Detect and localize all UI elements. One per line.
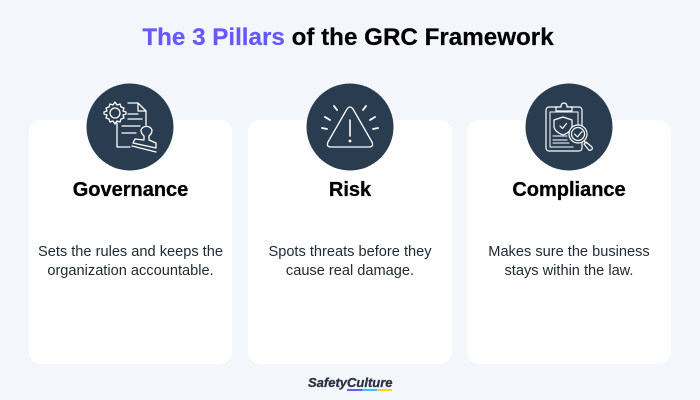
heading: risk: Risk (329, 179, 371, 201)
text: risk description (268, 244, 432, 279)
text: compliance description (488, 244, 650, 279)
panel: governance (29, 120, 232, 364)
text: governance description: Sets the rules and keeps the (38, 244, 223, 260)
text: governance description: organization accountable. (47, 263, 214, 279)
heading: governance: Governance (73, 179, 188, 201)
logo: SafetyCulture: SafetyCulture (308, 375, 393, 390)
text: compliance description: stays within the law. (504, 263, 633, 279)
text: compliance description: Makes sure the business (488, 244, 650, 260)
title: The 3 Pillars of the GRC Framework (142, 24, 554, 51)
text: risk description: Spots threats before they (268, 244, 432, 260)
text: governance description (38, 244, 223, 279)
panel: compliance (467, 120, 671, 364)
heading: compliance: Compliance (512, 179, 626, 201)
icon: risk warning triangle (306, 84, 394, 170)
text: risk description: cause real damage. (286, 263, 414, 279)
icon: governance document, gear and stamp (86, 84, 174, 170)
panel: risk (248, 120, 452, 364)
icon: compliance clipboard, shield and magnifier (526, 84, 612, 170)
